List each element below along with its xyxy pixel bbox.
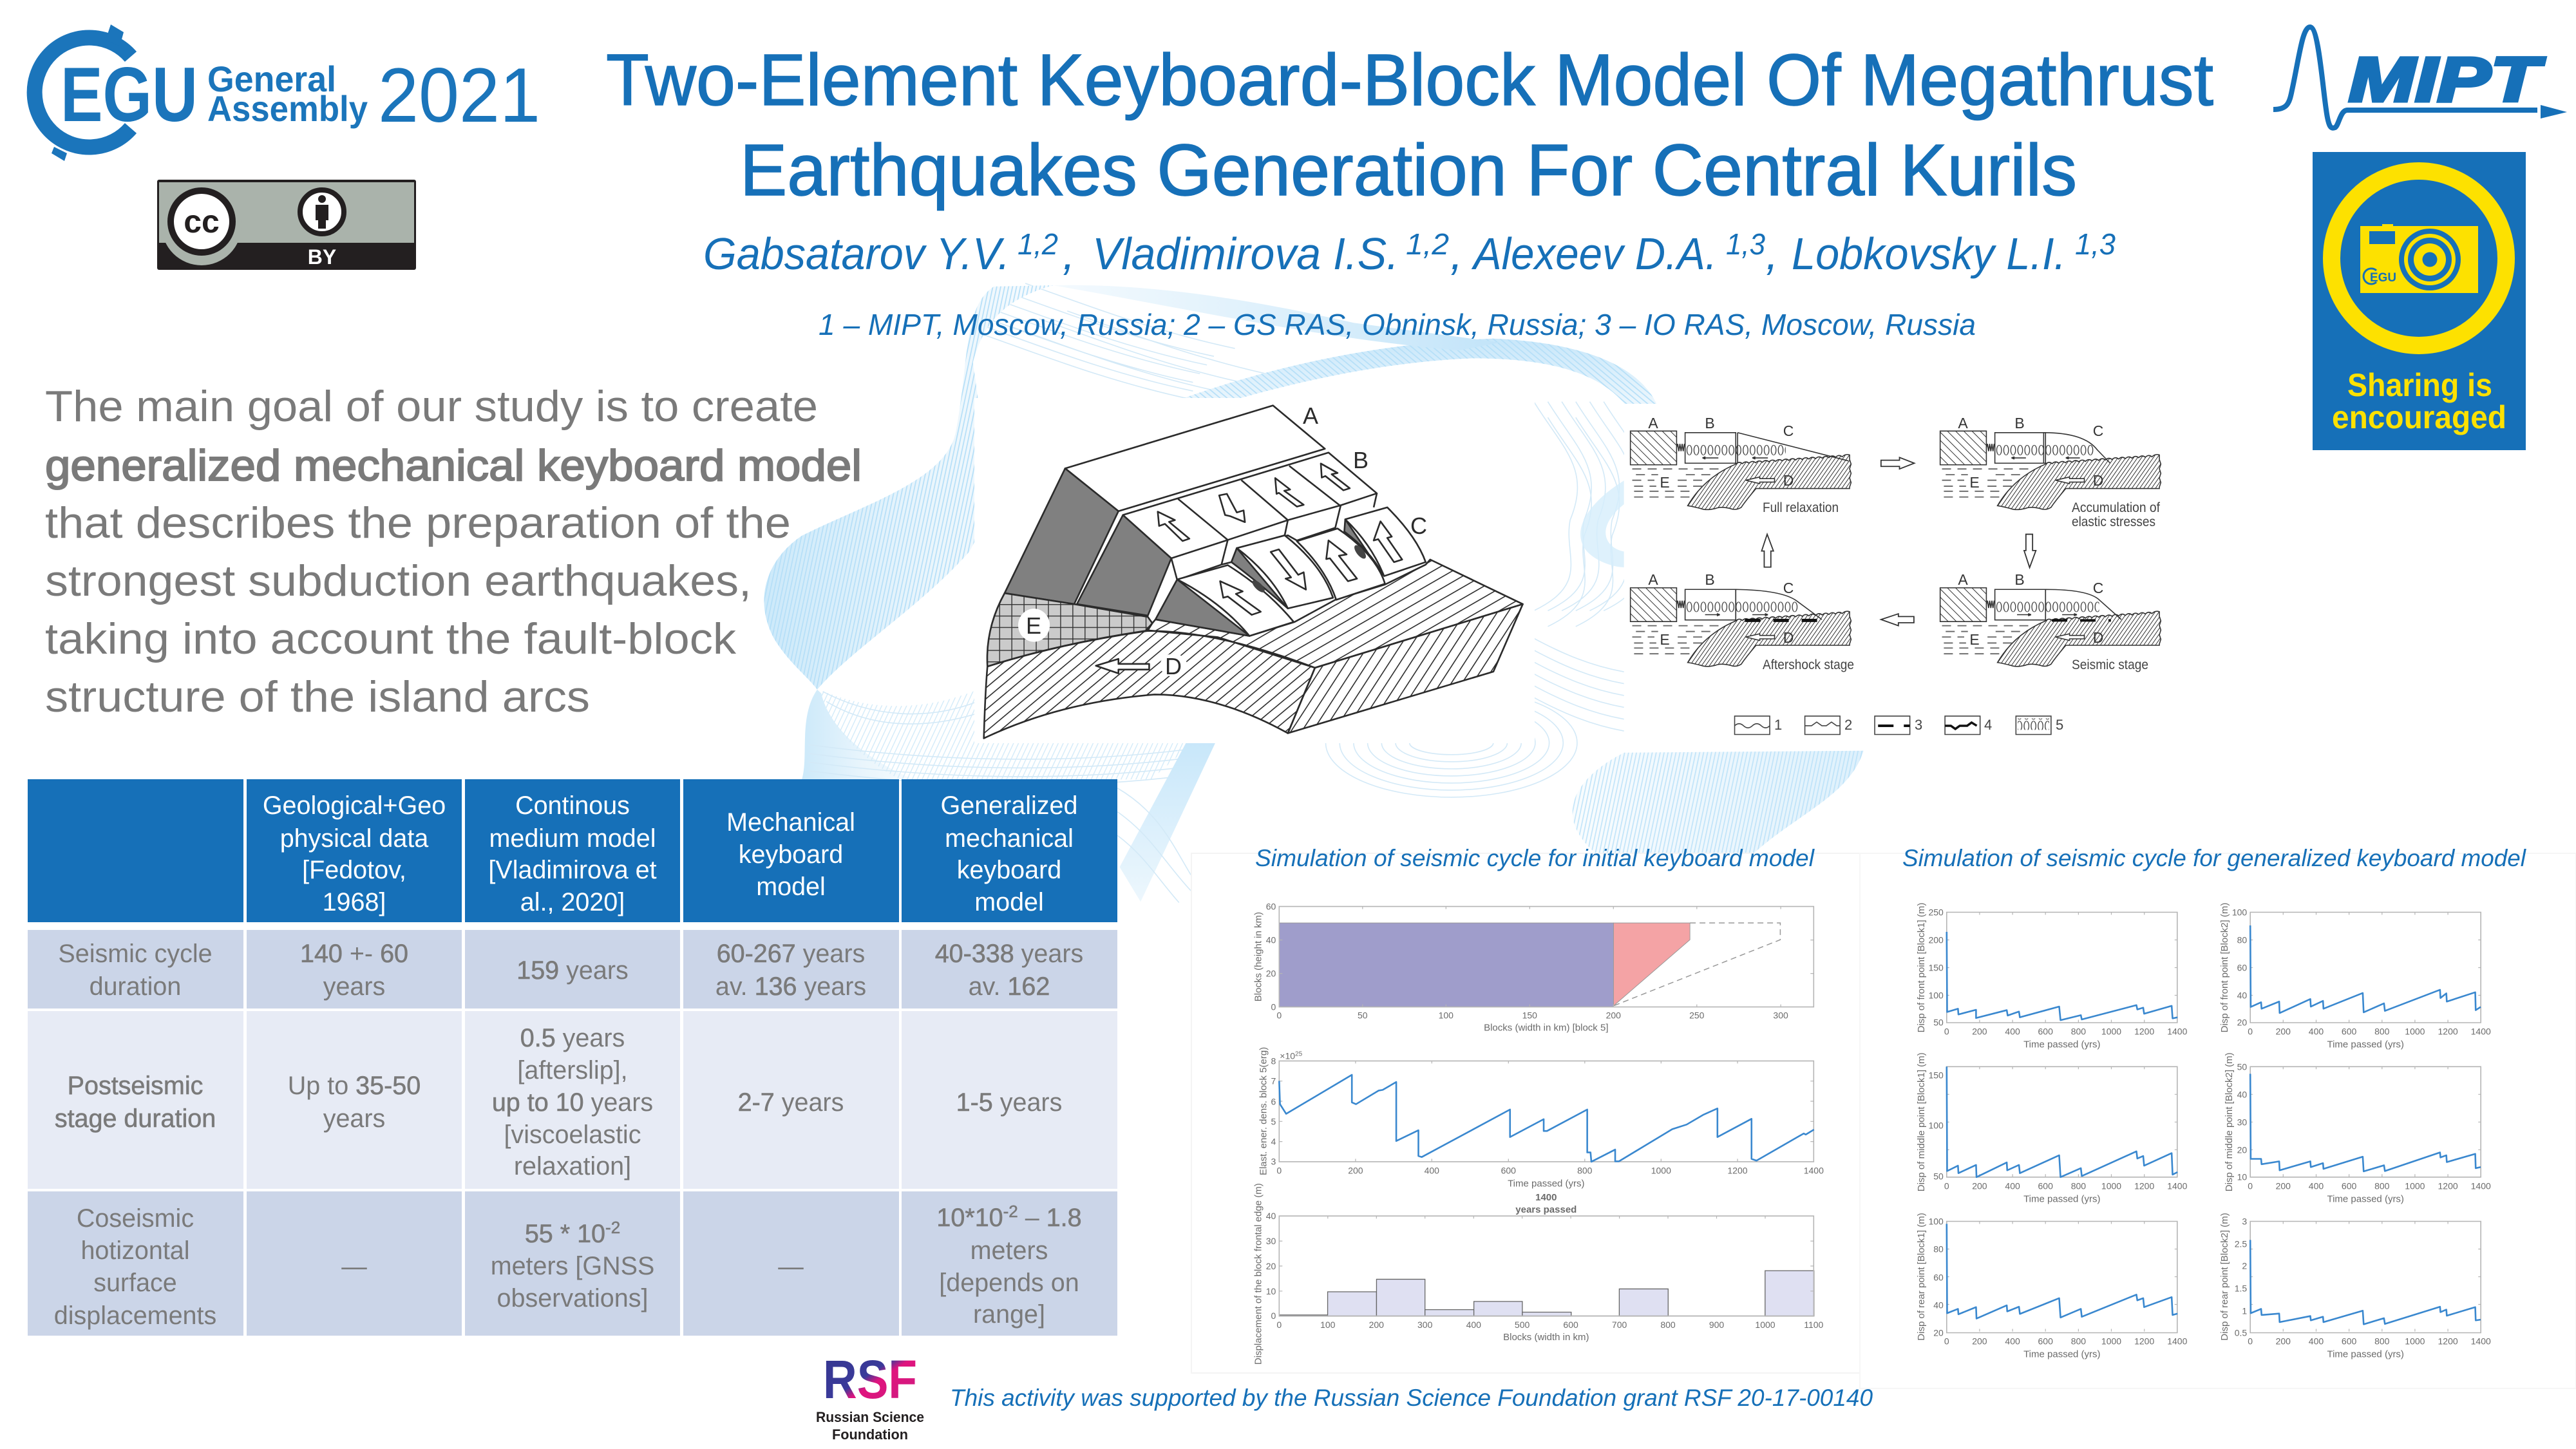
table row: seismic cycle duration: av. 136 years: [715, 972, 866, 1001]
chart: middle point block 1: 1200: [2134, 1180, 2154, 1191]
chart: elastic energy density over time: 1200: [1727, 1165, 1748, 1175]
authors: 1,3: [1726, 227, 1765, 261]
badge: CC BY licence: cc: [184, 204, 220, 240]
chart: middle point block 2: 600: [2342, 1180, 2356, 1191]
chart: block geometry: 250: [1689, 1010, 1705, 1021]
panel: accumulation of elastic stresses: E: [1969, 474, 1980, 491]
heading: generalized model simulation: Simulation of seismic cycle for generalized keyboard model: [1902, 845, 2527, 871]
panel: accumulation of elastic stresses: B: [2014, 415, 2025, 431]
panel: aftershock stage: [1631, 571, 1854, 672]
panel: full relaxation: Full relaxation: [1763, 500, 1839, 515]
chart: block frontal edge displacement histogram: Blocks (width in km): [1503, 1332, 1589, 1343]
chart: middle point block 2: 1400: [2471, 1180, 2491, 1191]
panel: aftershock stage: A: [1648, 571, 1658, 588]
logo: Russian Science Foundation: RSF: [823, 1349, 917, 1410]
logo: EGU General Assembly 2021: Assembly: [207, 88, 368, 129]
chart: front point block 1: 100: [1928, 990, 1944, 1001]
table row: seismic cycle duration: 60-267 years: [717, 940, 865, 968]
logo: EGU General Assembly 2021: [35, 24, 540, 161]
panel: aftershock stage: E: [1660, 631, 1670, 648]
figure: 3D block diagram of the keyboard model: D: [1165, 653, 1182, 679]
panel: accumulation of elastic stresses: elastic stresses: [2072, 515, 2155, 529]
chart: block geometry: 0: [1271, 1002, 1276, 1012]
badge: CC BY licence: BY: [308, 245, 336, 269]
chart: rear point block 2: 200: [2276, 1336, 2291, 1346]
table row: postseismic stage duration: [28, 1011, 1117, 1189]
acknowledgement: This activity was supported by the Russian Science Foundation grant RSF 20-17-00140: [950, 1385, 1873, 1411]
panel: accumulation of elastic stresses: Accumulation of: [2072, 500, 2160, 515]
chart: middle point block 1: Disp of middle point [Block1] (m): [1916, 1052, 1927, 1191]
table row: postseismic stage duration: 0.5 years: [520, 1024, 625, 1052]
table row: seismic cycle duration: 40-338 years: [935, 940, 1083, 968]
icon: camera: EGU: [2370, 271, 2396, 285]
chart: middle point block 1: 100: [1928, 1120, 1944, 1130]
table row: seismic cycle duration: 140 +- 60: [300, 940, 408, 968]
badge: Sharing is encouraged: Sharing is: [2347, 367, 2492, 403]
chart: front point block 2: 600: [2342, 1027, 2356, 1037]
table header: mechanical: [945, 824, 1074, 853]
text block: main goal of the study: strongest subduction earthquakes,: [45, 556, 752, 605]
chart: block frontal edge displacement histogram: 10: [1266, 1286, 1276, 1296]
chart: block geometry: 0: [1276, 1010, 1282, 1021]
table row: seismic cycle duration: [28, 930, 1117, 1009]
panel: seismic stage: B: [2014, 571, 2025, 588]
panel: simulation for generalized keyboard model: [1860, 845, 2576, 1388]
chart: block frontal edge displacement histogram: 700: [1612, 1320, 1627, 1330]
chart: front point block 2: 200: [2276, 1027, 2291, 1037]
panel: accumulation of elastic stresses: D: [2093, 472, 2103, 489]
chart: middle point block 1: 50: [1933, 1171, 1944, 1181]
chart: block frontal edge displacement histogram: 0: [1271, 1311, 1276, 1321]
chart: rear point block 2: 1200: [2438, 1336, 2458, 1346]
chart: front point block 1: 250: [1928, 907, 1944, 917]
chart: rear point block 1: 40: [1933, 1300, 1944, 1310]
table row: coseismic horizontal surface displacements: meters: [971, 1236, 1048, 1265]
table header: Geological+Geo: [263, 791, 446, 820]
panel: full relaxation: E: [1660, 474, 1670, 491]
chart: middle point block 2: 800: [2374, 1180, 2390, 1191]
table row: postseismic stage duration: 1-5 years: [956, 1088, 1062, 1117]
panel: seismic stage: Seismic stage: [2072, 658, 2148, 672]
chart: front point block 1: 150: [1928, 962, 1944, 972]
chart: elastic energy density over time: 600: [1501, 1165, 1516, 1175]
chart: elastic energy density over time: 4: [1271, 1136, 1276, 1146]
chart: rear point block 2: 600: [2342, 1336, 2356, 1346]
chart: block frontal edge displacement histogram: 300: [1417, 1320, 1433, 1330]
legend: fault types 1-5: 4: [1984, 717, 1992, 733]
chart: middle point block 1: 150: [1928, 1070, 1944, 1080]
table row: coseismic horizontal surface displacements: displacements: [54, 1302, 216, 1330]
chart: front point block 2: 60: [2237, 962, 2247, 972]
table header: [Fedotov,: [302, 856, 406, 884]
table row: coseismic horizontal surface displacements: 1.8: [1046, 1204, 1082, 1232]
table row: postseismic stage duration: [afterslip],: [517, 1056, 628, 1084]
chart: front point block 2: 100: [2232, 907, 2247, 917]
authors: 1,2: [1018, 227, 1058, 261]
chart: middle point block 1: 1000: [2101, 1180, 2121, 1191]
chart: block frontal edge displacement histogram: 1100: [1804, 1320, 1824, 1330]
table header: Generalized: [940, 791, 1078, 820]
chart: middle point block 2: 10: [2237, 1171, 2247, 1182]
table row: coseismic horizontal surface displacements: [28, 1191, 1117, 1336]
chart: rear point block 1: 600: [2038, 1336, 2053, 1346]
table row: coseismic horizontal surface displacements: 10*10: [936, 1204, 1003, 1232]
chart: rear point block 1: 80: [1933, 1244, 1944, 1255]
authors: Alexeev D.A.: [1471, 229, 1717, 279]
table row: coseismic horizontal surface displacements: —: [341, 1253, 367, 1281]
chart: block frontal edge displacement histogram: 600: [1563, 1320, 1578, 1330]
chart: middle point block 2: Time passed (yrs): [2327, 1193, 2404, 1204]
chart: elastic energy density over time: 7: [1271, 1075, 1276, 1086]
authors: ,: [1766, 229, 1778, 279]
chart: block geometry: 50: [1358, 1010, 1368, 1021]
affiliations: 1 – MIPT, Moscow, Russia; 2 – GS RAS, Obninsk, Russia; 3 – IO RAS, Moscow, Russia: [819, 308, 1976, 341]
table row: coseismic horizontal surface displacements: -2: [1003, 1202, 1018, 1221]
chart: rear point block 2: 800: [2374, 1336, 2390, 1346]
chart: rear point block 2: 1000: [2405, 1336, 2425, 1346]
text block: main goal of the study: taking into account the fault-block: [45, 614, 737, 663]
table row: coseismic horizontal surface displacements: hotizontal: [80, 1236, 190, 1265]
chart: front point block 1: 600: [2038, 1027, 2053, 1037]
chart: front point block 1: [1916, 903, 2188, 1050]
chart: rear point block 1: 20: [1933, 1328, 1944, 1338]
chart: rear point block 1: 1000: [2101, 1336, 2121, 1346]
chart: elastic energy density over time: 5: [1271, 1116, 1276, 1126]
legend: fault types 1-5: 2: [1844, 717, 1852, 733]
table header: model: [756, 873, 826, 901]
panel: accumulation of elastic stresses: A: [1958, 415, 1968, 431]
figure: 3D block diagram of the keyboard model: A: [1303, 402, 1318, 429]
table header: keyboard: [739, 840, 843, 869]
chart: rear point block 2: 2.5: [2235, 1239, 2247, 1249]
chart: rear point block 2: 0.5: [2235, 1328, 2247, 1338]
table row: coseismic horizontal surface displacements: range]: [973, 1300, 1045, 1329]
chart: rear point block 1: 0: [1944, 1336, 1949, 1346]
chart: middle point block 1: 400: [2005, 1180, 2020, 1191]
chart: front point block 2: 40: [2237, 990, 2247, 1001]
title: Earthquakes Generation For Central Kurils: [740, 129, 2077, 211]
table row: seismic cycle duration: 159 years: [516, 956, 629, 985]
chart: rear point block 1: 1200: [2134, 1336, 2154, 1346]
chart: front point block 1: 200: [1972, 1027, 1987, 1037]
panel: seismic stage: D: [2093, 629, 2103, 646]
chart: front point block 2: Time passed (yrs): [2327, 1039, 2404, 1050]
panel: seismic stage: C: [2093, 580, 2103, 596]
chart: elastic energy density over time: Time passed (yrs): [1508, 1178, 1585, 1189]
chart: elastic energy density over time: 3: [1271, 1156, 1276, 1166]
panel: simulation for initial keyboard model: [1191, 845, 1860, 1373]
chart: front point block 1: 400: [2005, 1027, 2020, 1037]
panel: full relaxation: [1631, 415, 1851, 515]
chart: rear point block 1: 400: [2005, 1336, 2020, 1346]
chart: block frontal edge displacement histogram: 100: [1320, 1320, 1336, 1330]
chart: block geometry: 150: [1522, 1010, 1537, 1021]
chart: elastic energy density over time: 400: [1425, 1165, 1439, 1175]
chart: middle point block 2: 1000: [2405, 1180, 2425, 1191]
chart: rear point block 2: Disp of rear point [Block2] (m): [2219, 1213, 2230, 1341]
chart: rear point block 2: Time passed (yrs): [2327, 1349, 2404, 1360]
chart: rear point block 1: Disp of rear point [Block1] (m): [1916, 1213, 1927, 1341]
chart: front point block 2: 1400: [2471, 1027, 2491, 1037]
table header: Mechanical: [726, 808, 855, 837]
chart: front point block 1: 1200: [2134, 1027, 2154, 1037]
panel: aftershock stage: Aftershock stage: [1763, 658, 1854, 672]
badge: CC BY licence: [157, 180, 416, 270]
table row: coseismic horizontal surface displacements: Coseismic: [77, 1204, 194, 1233]
table header: [Vladimirova et: [488, 856, 657, 884]
authors: ,: [1063, 229, 1075, 279]
legend: fault types 1-5: [1735, 716, 2063, 735]
panel: accumulation of elastic stresses: [1940, 415, 2161, 529]
authors: Vladimirova I.S.: [1092, 229, 1399, 279]
chart: rear point block 2: 1400: [2471, 1336, 2491, 1346]
panel: aftershock stage: C: [1783, 580, 1794, 596]
chart: front point block 2: 20: [2237, 1018, 2247, 1028]
chart: middle point block 2: 0: [2248, 1180, 2253, 1191]
chart: front point block 2: 0: [2248, 1027, 2253, 1037]
chart: front point block 2: 1200: [2438, 1027, 2458, 1037]
chart: block geometry: 100: [1439, 1010, 1454, 1021]
panel: seismic stage: A: [1958, 571, 1968, 588]
table row: coseismic horizontal surface displacements: —: [778, 1253, 804, 1281]
background: flowing blue wave ribbons: [764, 283, 1864, 902]
chart: rear point block 1: [1916, 1213, 2188, 1360]
panel: accumulation of elastic stresses: C: [2093, 422, 2103, 439]
table row: coseismic horizontal surface displacements: surface: [93, 1269, 177, 1297]
chart: rear point block 1: 1400: [2167, 1336, 2188, 1346]
table row: postseismic stage duration: [viscoelastic: [504, 1121, 641, 1149]
chart: middle point block 1: 1400: [2167, 1180, 2188, 1191]
chart: middle point block 1: 200: [1972, 1180, 1987, 1191]
text block: main goal of the study: [45, 382, 862, 721]
chart: middle point block 2: 40: [2237, 1089, 2247, 1099]
logo: MIPT: [2273, 27, 2567, 128]
chart: elastic energy density over time: 0: [1276, 1165, 1282, 1175]
chart: front point block 1: 0: [1944, 1027, 1949, 1037]
title: Two-Element Keyboard-Block Model Of Megathrust: [606, 39, 2213, 120]
panel: full relaxation: B: [1705, 415, 1715, 431]
chart: elastic energy density over time: 1000: [1651, 1165, 1671, 1175]
logo: EGU General Assembly 2021: EGU: [61, 52, 198, 138]
chart: elastic energy density over time: 1400: [1804, 1165, 1824, 1175]
panel: full relaxation: C: [1783, 422, 1794, 439]
chart: middle point block 1: [1916, 1052, 2188, 1204]
panel: aftershock stage: B: [1705, 571, 1715, 588]
chart: front point block 1: Disp of front point [Block1] (m): [1916, 903, 1927, 1032]
chart: middle point block 2: 20: [2237, 1144, 2247, 1155]
table header: medium model: [489, 824, 656, 853]
chart: block frontal edge displacement histogram: 1000: [1755, 1320, 1776, 1330]
chart: block geometry: [1253, 902, 1814, 1034]
chart: front point block 1: 1400: [2167, 1027, 2188, 1037]
table row: coseismic horizontal surface displacements: [depends on: [939, 1269, 1079, 1297]
chart: elastic energy density over time: Elast. ener. dens. block 5(erg): [1258, 1047, 1269, 1175]
chart: block geometry: 200: [1606, 1010, 1621, 1021]
chart: front point block 2: 400: [2309, 1027, 2324, 1037]
logo: Russian Science Foundation: Foundation: [832, 1426, 908, 1443]
legend: fault types 1-5: 3: [1915, 717, 1922, 733]
heading: initial model simulation: Simulation of seismic cycle for initial keyboard model: [1255, 845, 1815, 871]
table row: seismic cycle duration: years: [323, 972, 385, 1001]
chart: block geometry: 300: [1773, 1010, 1788, 1021]
chart: block geometry: Blocks (height in km): [1253, 912, 1264, 1001]
table header: Continous: [515, 791, 630, 820]
text block: main goal of the study: generalized mechanical keyboard model: [45, 441, 862, 490]
table row: coseismic horizontal surface displacements: meters [GNSS: [491, 1252, 654, 1280]
text block: main goal of the study: that describes the preparation of the: [45, 498, 791, 547]
chart: elastic energy density over time: 6: [1271, 1096, 1276, 1106]
logo: Russian Science Foundation: [816, 1349, 924, 1443]
figure: 3D block diagram of the keyboard model: [974, 398, 1535, 743]
table row: seismic cycle duration: Seismic cycle: [58, 940, 213, 968]
legend: fault types 1-5: 5: [2056, 717, 2063, 733]
chart: block geometry: Blocks (width in km) [block 5]: [1484, 1023, 1608, 1034]
chart: block frontal edge displacement histogram: 800: [1660, 1320, 1676, 1330]
chart: block frontal edge displacement histogram: 40: [1266, 1211, 1276, 1221]
badge: Sharing is encouraged: encouraged: [2332, 399, 2506, 435]
panel: aftershock stage: D: [1783, 629, 1794, 646]
chart: block frontal edge displacement histogram: 900: [1709, 1320, 1724, 1330]
table header: [28, 779, 1117, 922]
chart: rear point block 1: 100: [1928, 1216, 1944, 1226]
chart: rear point block 2: 1.5: [2235, 1283, 2247, 1293]
chart: front point block 2: 80: [2237, 935, 2247, 945]
chart: block frontal edge displacement histogram: 30: [1266, 1236, 1276, 1246]
panel: full relaxation: A: [1648, 415, 1658, 431]
text block: main goal of the study: The main goal of our study is to create: [45, 382, 818, 431]
table row: postseismic stage duration: Up to 35-50: [288, 1072, 421, 1100]
chart: block frontal edge displacement histogram: 400: [1466, 1320, 1481, 1330]
chart: front point block 1: Time passed (yrs): [2023, 1039, 2101, 1050]
arrows: cycle between stages: [1761, 457, 2036, 626]
table: comparison of models: [28, 779, 1117, 1336]
table row: postseismic stage duration: up to 10 years: [492, 1088, 653, 1117]
logo: Russian Science Foundation: Russian Science: [816, 1409, 924, 1425]
chart: rear point block 1: 200: [1972, 1336, 1987, 1346]
icon: camera: [2360, 224, 2478, 293]
panel: seismic stage: [1940, 571, 2161, 672]
text block: main goal of the study: structure of the island arcs: [45, 672, 590, 721]
authors: ,: [1450, 229, 1463, 279]
chart: rear point block 1: Time passed (yrs): [2023, 1349, 2101, 1360]
chart: block frontal edge displacement histogram: 200: [1369, 1320, 1384, 1330]
table row: seismic cycle duration: duration: [90, 972, 181, 1001]
chart: block frontal edge displacement histogram: 20: [1266, 1261, 1276, 1271]
chart: middle point block 1: 800: [2071, 1180, 2086, 1191]
logo: EGU General Assembly 2021: General: [207, 59, 336, 99]
chart: front point block 1: 50: [1933, 1018, 1944, 1028]
panel: full relaxation: D: [1783, 472, 1794, 489]
chart: rear point block 2: 3: [2242, 1216, 2247, 1226]
chart: front point block 1: 1000: [2101, 1027, 2121, 1037]
chart: middle point block 2: [2224, 1052, 2491, 1204]
chart: front point block 2: Disp of front point [Block2] (m): [2219, 903, 2230, 1032]
chart: block frontal edge displacement histogram: 1400: [1535, 1192, 1557, 1203]
title: [606, 39, 2213, 211]
authors: [703, 227, 2116, 279]
logo: EGU General Assembly 2021: 2021: [378, 52, 540, 138]
chart: block geometry: 20: [1266, 969, 1276, 979]
chart: rear point block 2: [2219, 1213, 2491, 1360]
legend: fault types 1-5: 1: [1774, 717, 1782, 733]
chart: front point block 2: 1000: [2405, 1027, 2425, 1037]
table header: 1968]: [323, 888, 386, 916]
chart: front point block 2: [2219, 903, 2491, 1050]
chart: block frontal edge displacement histogram: years passed: [1515, 1204, 1577, 1215]
table header: keyboard: [957, 856, 1061, 884]
table row: seismic cycle duration: av. 162: [969, 972, 1050, 1001]
chart: block frontal edge displacement histogram: Displacement of the block frontal edge (m): [1253, 1183, 1264, 1365]
table row: postseismic stage duration: 2-7 years: [738, 1088, 844, 1117]
authors: 1,2: [1406, 227, 1449, 261]
chart: elastic energy density over time: 25: [1295, 1050, 1303, 1057]
chart: rear point block 1: 60: [1933, 1273, 1944, 1283]
chart: middle point block 2: 400: [2309, 1180, 2324, 1191]
chart: elastic energy density over time: 8: [1271, 1056, 1276, 1066]
chart: middle point block 1: 0: [1944, 1180, 1949, 1191]
chart: block frontal edge displacement histogram: 500: [1515, 1320, 1530, 1330]
table row: postseismic stage duration: stage duration: [55, 1104, 216, 1133]
chart: middle point block 1: 600: [2038, 1180, 2053, 1191]
chart: middle point block 2: Disp of middle point [Block2] (m): [2224, 1052, 2235, 1191]
chart: rear point block 2: 2: [2242, 1261, 2247, 1271]
chart: elastic energy density over time: 200: [1348, 1165, 1363, 1175]
chart: rear point block 1: 800: [2071, 1336, 2086, 1346]
chart: middle point block 2: 50: [2237, 1061, 2247, 1072]
chart: elastic energy density over time: ×10: [1280, 1050, 1295, 1061]
table row: coseismic horizontal surface displacements: -2: [605, 1218, 620, 1237]
table header: al., 2020]: [520, 888, 625, 916]
chart: elastic energy density over time: 800: [1577, 1165, 1593, 1175]
chart: rear point block 2: 1: [2242, 1306, 2247, 1316]
table header: model: [974, 888, 1044, 916]
chart: block frontal edge displacement histogram: 0: [1276, 1320, 1282, 1330]
logo: MIPT: MIPT: [2349, 44, 2546, 115]
chart: front point block 2: 800: [2374, 1027, 2390, 1037]
authors: 1,3: [2075, 227, 2116, 261]
authors: Lobkovsky L.I.: [1792, 229, 2066, 279]
figure: 3D block diagram of the keyboard model: E: [1026, 612, 1041, 639]
table row: postseismic stage duration: Postseismic: [68, 1072, 203, 1100]
figure: 3D block diagram of the keyboard model: C: [1410, 513, 1427, 539]
table row: coseismic horizontal surface displacements: –: [1018, 1204, 1046, 1232]
chart: middle point block 2: 1200: [2438, 1180, 2458, 1191]
badge: Sharing is encouraged: [2313, 152, 2526, 450]
chart: middle point block 2: 200: [2276, 1180, 2291, 1191]
chart: block geometry: 40: [1266, 935, 1276, 945]
chart: rear point block 2: 0: [2248, 1336, 2253, 1346]
chart: front point block 1: 200: [1928, 935, 1944, 945]
chart: front point block 1: 800: [2071, 1027, 2086, 1037]
chart: middle point block 2: 30: [2237, 1117, 2247, 1127]
table row: postseismic stage duration: years: [323, 1104, 385, 1133]
chart: block geometry: 60: [1266, 902, 1276, 912]
figure: four stages of the seismic cycle: [1624, 404, 2169, 750]
table row: postseismic stage duration: relaxation]: [514, 1152, 631, 1180]
table row: coseismic horizontal surface displacements: 55 * 10: [525, 1220, 605, 1248]
chart: rear point block 2: 400: [2309, 1336, 2324, 1346]
table header: physical data: [280, 824, 428, 853]
table row: coseismic horizontal surface displacements: observations]: [497, 1284, 648, 1312]
chart: block frontal edge displacement histogram: [1253, 1183, 1824, 1365]
chart: elastic energy density over time: [1258, 1047, 1824, 1189]
chart: middle point block 1: Time passed (yrs): [2023, 1193, 2101, 1204]
panel: seismic stage: E: [1969, 631, 1980, 648]
authors: Gabsatarov Y.V.: [703, 229, 1010, 279]
figure: 3D block diagram of the keyboard model: B: [1353, 447, 1368, 473]
